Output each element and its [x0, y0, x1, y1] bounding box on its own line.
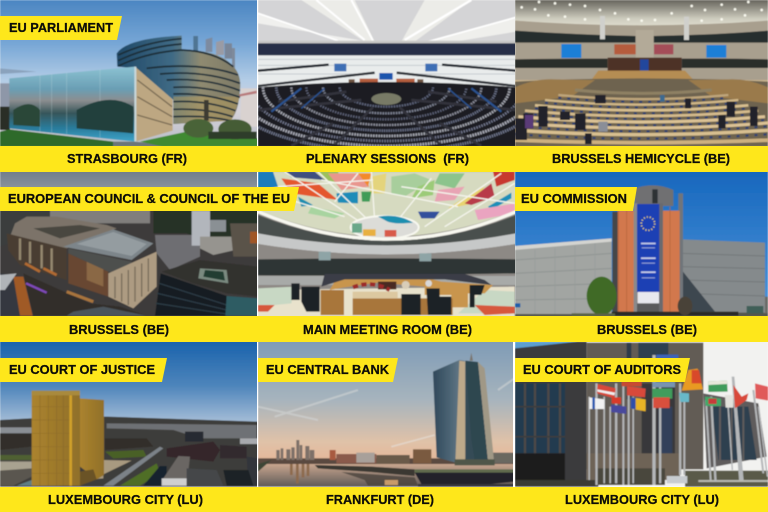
photo: Strasbourg parliament building — [0, 0, 258, 147]
photo: Court of Auditors with flags — [515, 340, 768, 487]
label: EU Commission — [515, 187, 637, 211]
caption: Strasbourg: STRASBOURG (FR) — [67, 151, 187, 166]
panel: EU Court of Justice — [0, 340, 258, 512]
photo: ECB tower and Frankfurt skyline — [258, 340, 516, 487]
caption: Luxembourg City — [515, 487, 768, 512]
caption: main meeting room: MAIN MEETING ROOM (BE) — [303, 322, 472, 337]
caption: Brussels — [0, 316, 258, 342]
label: European Council and Council of the EU — [0, 187, 299, 211]
panel: EU Commission — [515, 170, 768, 342]
label: European Council and Council of the EU: EUROPEAN COUNCIL & COUNCIL OF THE EU — [8, 191, 290, 206]
caption: Brussels: BRUSSELS (BE) — [69, 322, 169, 337]
caption: Luxembourg City — [0, 487, 258, 512]
panel: EU Central Bank — [258, 340, 516, 512]
label: EU Court of Justice: EU COURT OF JUSTICE — [9, 362, 155, 377]
photo: Berlaymont building — [515, 170, 768, 317]
label: EU Court of Auditors: EU COURT OF AUDITORS — [523, 362, 681, 377]
caption: Frankfurt — [258, 487, 515, 512]
photo: Strasbourg hemicycle — [258, 0, 515, 146]
caption: Strasbourg — [0, 146, 258, 172]
label: EU Parliament — [0, 16, 122, 40]
photo: Brussels hemicycle — [512, 0, 768, 147]
caption: Brussels — [515, 316, 768, 342]
caption: plenary sessions: PLENARY SESSIONS (FR) — [306, 151, 469, 166]
panel: Brussels hemicycle — [512, 0, 768, 172]
caption: Luxembourg City: LUXEMBOURG CITY (LU) — [565, 492, 719, 507]
panel: plenary sessions — [258, 0, 515, 172]
label: EU Court of Justice — [0, 358, 167, 382]
photo: Europa building aerial view — [0, 170, 258, 317]
caption: Brussels hemicycle: BRUSSELS HEMICYCLE (BE) — [552, 151, 730, 166]
label: EU Commission: EU COMMISSION — [521, 191, 627, 206]
panel: European Council — [0, 170, 299, 342]
label: EU Court of Auditors — [515, 358, 690, 382]
label: EU Central Bank — [258, 358, 398, 382]
caption: plenary sessions — [258, 146, 515, 172]
label: EU Central Bank: EU CENTRAL BANK — [266, 362, 390, 377]
panel: EU Parliament, Strasbourg — [0, 0, 258, 172]
caption: Brussels: BRUSSELS (BE) — [597, 322, 697, 337]
caption: main meeting room — [258, 316, 515, 342]
label: EU Parliament: EU PARLIAMENT — [9, 20, 113, 35]
caption: Luxembourg City: LUXEMBOURG CITY (LU) — [48, 492, 203, 507]
panel: main meeting room — [258, 170, 516, 342]
caption: Frankfurt: FRANKFURT (DE) — [326, 492, 434, 507]
panel: EU Court of Auditors — [515, 340, 768, 512]
photo: Europa building meeting room — [258, 170, 516, 317]
caption: Brussels hemicycle — [515, 146, 768, 172]
photo: Court of Justice towers and city — [0, 340, 258, 487]
